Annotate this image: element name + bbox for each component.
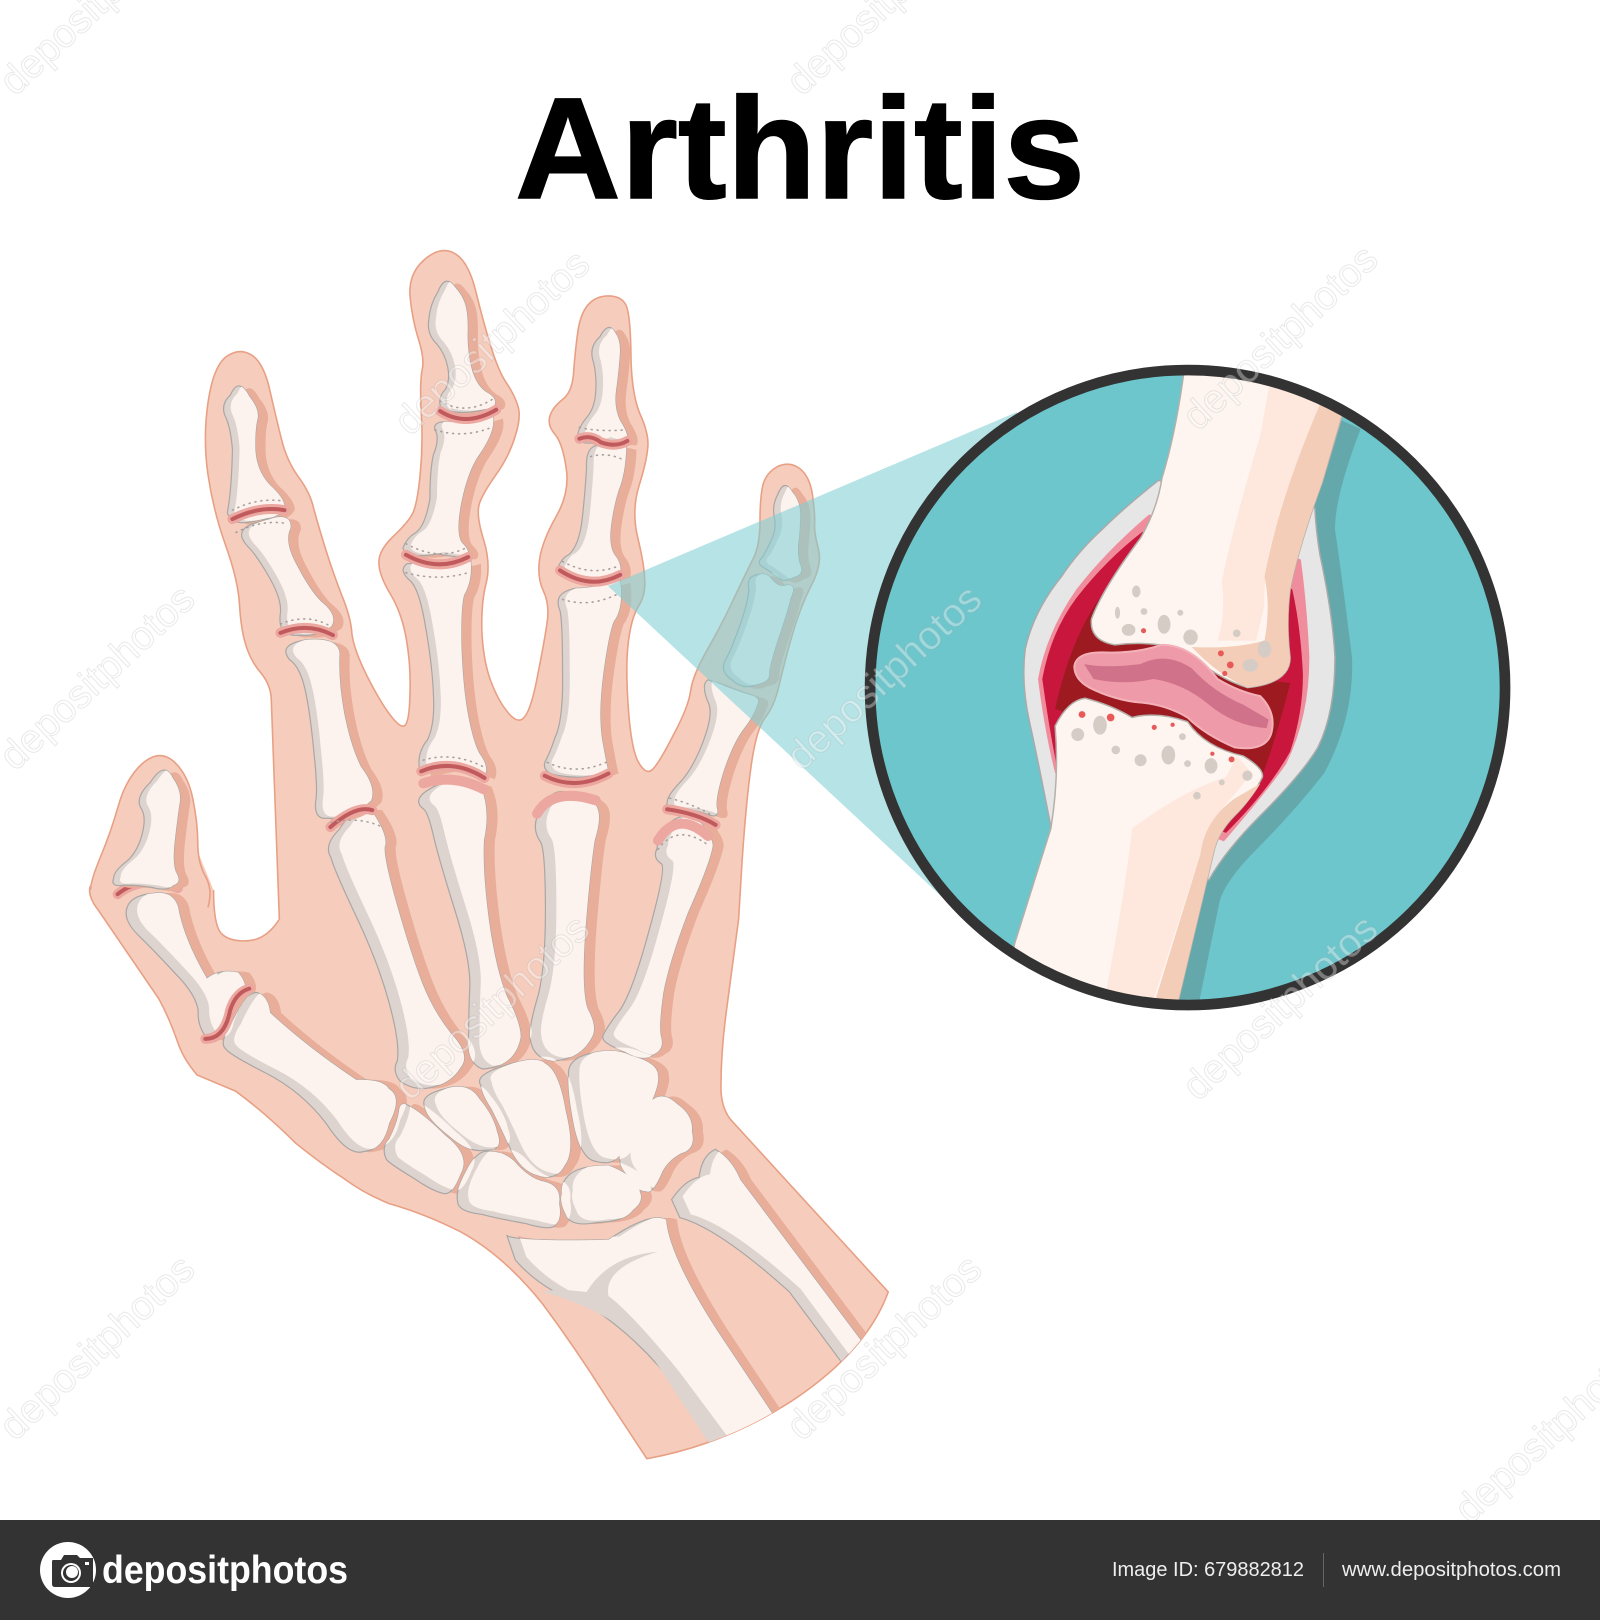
bone shadow — [1180, 420, 1360, 1000]
lower bone — [1013, 698, 1264, 1000]
title: Arthritis — [515, 68, 1085, 229]
bone erosion spots — [1071, 585, 1271, 800]
footer logo icon — [40, 1542, 96, 1598]
hand skin: fingers — [91, 251, 819, 920]
tissue band behind bones — [166, 784, 866, 1412]
hand skin: palm and wrist — [90, 850, 888, 1459]
watermarks: depositphotos — [778, 577, 990, 779]
inflamed cartilage core — [1084, 659, 1269, 728]
circle background — [869, 369, 1506, 1006]
dark joint cavity — [1055, 589, 1290, 782]
watermarks: depositphotos — [778, 1247, 990, 1449]
circle border — [870, 370, 1505, 1005]
footer bar — [0, 1520, 1600, 1620]
watermarks: depositphotos — [1174, 237, 1386, 439]
skin outline — [90, 251, 888, 1459]
bone highlights — [137, 778, 872, 1445]
radius shading — [543, 1252, 729, 1449]
inflamed finger joints — [232, 399, 716, 849]
joint erosion speckles — [232, 399, 713, 849]
watermarks: depositphotos — [1174, 907, 1386, 1109]
watermarks: depositphotos — [386, 907, 598, 1109]
cartilage — [1074, 645, 1273, 748]
red erosion spots — [1079, 628, 1235, 762]
bone bases — [126, 781, 861, 1449]
finger bone highlights — [120, 279, 808, 887]
finger bones — [113, 279, 812, 891]
footer image id: Image ID: 679882812 — [1112, 1559, 1304, 1581]
synovial lining — [1038, 515, 1309, 841]
hand illustration — [90, 251, 888, 1459]
finger bone bases — [113, 281, 801, 889]
upper bone shading — [1218, 386, 1320, 640]
lower bone shading — [1106, 756, 1250, 998]
zoomed joint circle — [869, 341, 1506, 1034]
joint capsule — [1024, 480, 1335, 880]
footer website: www.depositphotos.com — [1341, 1559, 1561, 1581]
footer brand: depositphotos — [102, 1549, 348, 1592]
palm, wrist, forearm and carpal bones — [118, 778, 872, 1449]
magnifier cone — [608, 412, 1017, 897]
watermarks: depositphotos — [386, 242, 598, 444]
tissue band behind finger bones — [123, 283, 812, 891]
thumb base joint — [118, 882, 249, 1039]
upper bone — [1090, 375, 1343, 688]
inflamed joint space — [1042, 532, 1303, 833]
